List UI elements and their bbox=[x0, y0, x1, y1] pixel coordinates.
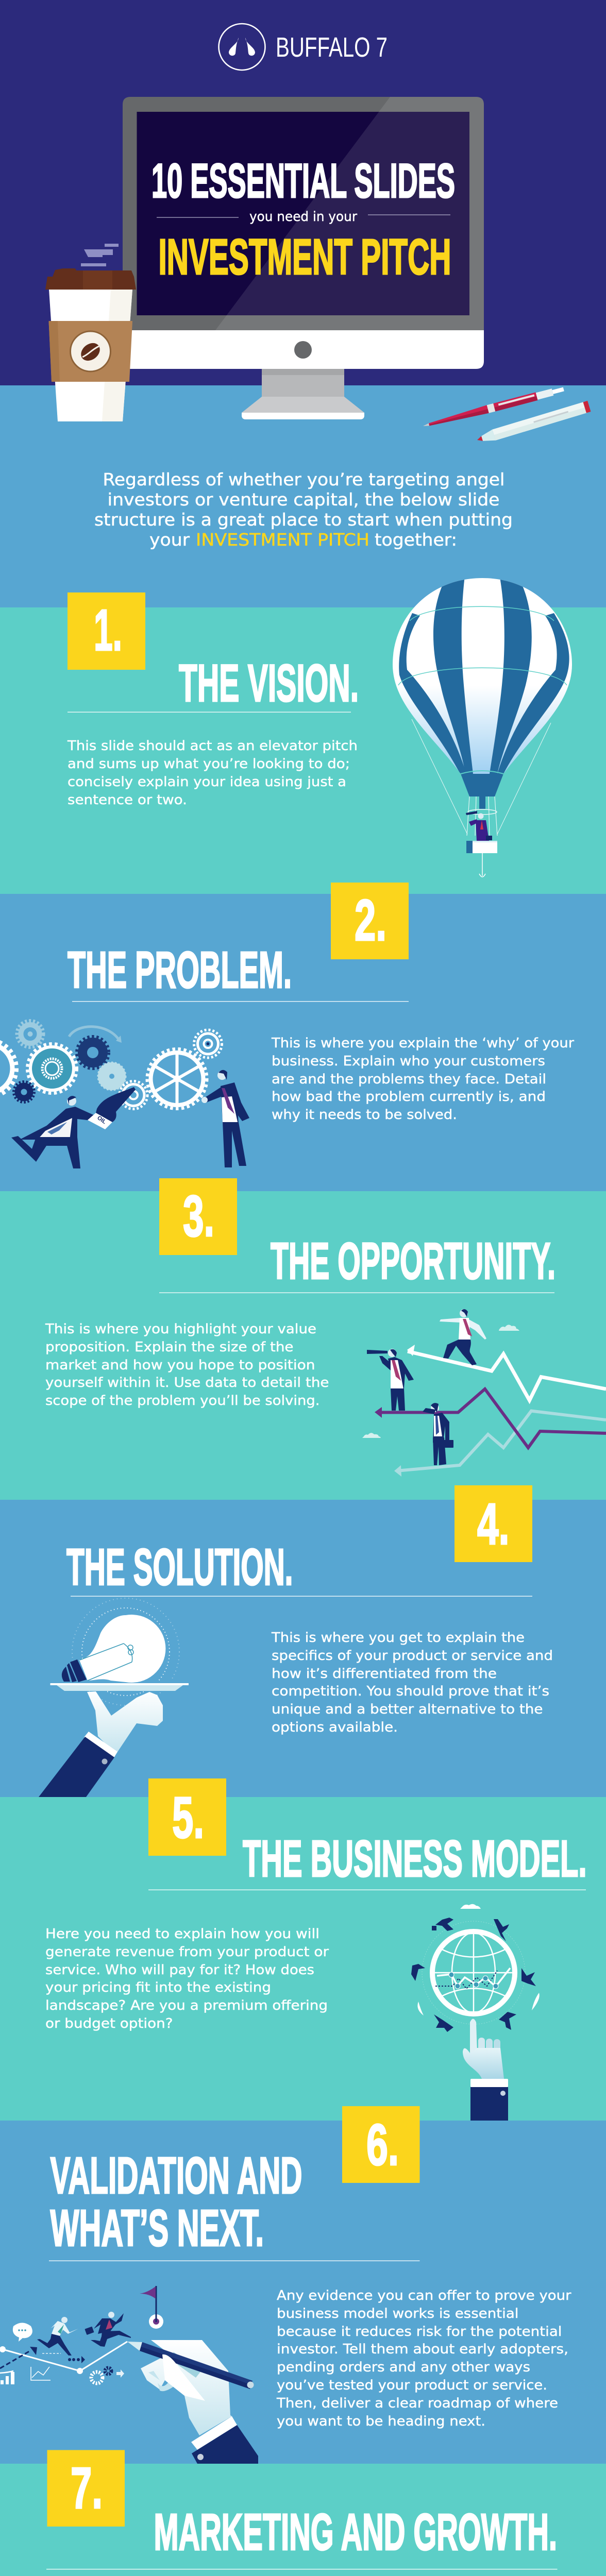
body text 5 bbox=[45, 1926, 329, 2031]
heading: validation and what's next: VALIDATION AND bbox=[50, 2147, 302, 2205]
number box 1: 1. bbox=[94, 598, 122, 663]
panel 2: the problem bbox=[0, 883, 606, 1191]
body text 2: how bad the problem currently is, and bbox=[272, 1089, 546, 1105]
body text 6: Then, deliver a clear roadmap of where bbox=[276, 2396, 558, 2411]
illustration: light bulb on a tray bbox=[39, 1598, 191, 1797]
body text 5: landscape? Are you a premium offering bbox=[45, 1998, 328, 2013]
intro text: INVESTMENT PITCH bbox=[196, 530, 369, 550]
body text 3: This is where you highlight your value bbox=[45, 1321, 316, 1337]
icon: flag target bbox=[140, 2286, 163, 2329]
panel 4: the solution bbox=[0, 1485, 606, 1797]
pens bbox=[422, 385, 591, 446]
body text 1: concisely explain your idea using just a bbox=[68, 774, 346, 790]
body text 4: This is where you get to explain the bbox=[271, 1630, 525, 1646]
body text 2: business. Explain who your customers bbox=[272, 1054, 545, 1069]
body text 6: Any evidence you can offer to prove your bbox=[277, 2288, 571, 2303]
figure: man with telescope bbox=[367, 1349, 414, 1411]
panel: intro bbox=[0, 244, 606, 607]
body text 4: unique and a better alternative to the bbox=[272, 1702, 543, 1717]
body text 5: or budget option? bbox=[45, 2016, 173, 2031]
number box 5 bbox=[148, 1778, 226, 1856]
number box 2: 2. bbox=[355, 888, 386, 953]
body text 1: sentence or two. bbox=[68, 792, 187, 808]
figure: runner in suit bbox=[85, 2312, 131, 2347]
intro text: structure is a great place to start when putting bbox=[94, 510, 513, 530]
number box 7 bbox=[47, 2450, 125, 2527]
number box 4: 4. bbox=[477, 1492, 509, 1556]
monitor stand bbox=[242, 369, 364, 419]
number box 3 bbox=[159, 1178, 237, 1255]
figure: kneeling man with oil can bbox=[11, 1087, 136, 1168]
body text 6: business model works is essential bbox=[277, 2306, 518, 2321]
body text 4: specifics of your product or service and bbox=[272, 1648, 553, 1664]
body text 3: scope of the problem you’ll be solving. bbox=[45, 1393, 319, 1409]
figure: runner in shirt bbox=[37, 2317, 78, 2355]
number box 3: 3. bbox=[183, 1183, 214, 1248]
figure: man turning the wheel bbox=[201, 1070, 249, 1167]
intro text bbox=[94, 470, 513, 550]
body text 4: how it’s differentiated from the bbox=[272, 1666, 497, 1682]
body text 5: generate revenue from your product or bbox=[45, 1944, 329, 1960]
body text 5: service. Who will pay for it? How does bbox=[45, 1962, 314, 1978]
panel 1: the vision bbox=[0, 572, 606, 894]
number box 4 bbox=[454, 1485, 532, 1562]
number box 6 bbox=[342, 2106, 419, 2183]
panel 3: the opportunity bbox=[0, 1178, 606, 1500]
heading: validation and what's next: WHAT’S NEXT. bbox=[50, 2199, 264, 2257]
heading: the vision: THE VISION. bbox=[179, 654, 359, 713]
body text 6 bbox=[276, 2288, 571, 2429]
figure: man with briefcase bbox=[423, 1403, 453, 1465]
coffee cup bbox=[45, 244, 136, 421]
intro text: together: bbox=[375, 530, 457, 550]
intro text: investors or venture capital, the below slide bbox=[107, 490, 500, 510]
heading: the problem: THE PROBLEM. bbox=[68, 941, 292, 999]
illustration: men on growth arrows bbox=[362, 1309, 606, 1477]
monitor bbox=[123, 97, 484, 369]
body text 4 bbox=[271, 1630, 553, 1735]
body text 5: Here you need to explain how you will bbox=[45, 1926, 319, 1942]
body text 6: you’ve tested your product or service. bbox=[277, 2378, 547, 2393]
illustration: hand spinning a globe bbox=[411, 1904, 540, 2121]
body text 1 bbox=[67, 738, 358, 808]
number box 7: 7. bbox=[71, 2455, 103, 2520]
header panel bbox=[0, 0, 606, 385]
body text 2: This is where you explain the ‘why’ of your bbox=[271, 1036, 574, 1051]
heading: validation and what's next bbox=[50, 2147, 302, 2257]
body text 1: This slide should act as an elevator pitch bbox=[67, 738, 358, 754]
subtitle: you need in your bbox=[249, 209, 357, 225]
body text 4: competition. You should prove that it’s bbox=[272, 1684, 549, 1699]
panel 5: the business model bbox=[0, 1778, 606, 2121]
icon: hot air balloon bbox=[393, 572, 572, 877]
body text 1: and sums up what you’re looking to do; bbox=[68, 756, 350, 772]
body text 3: market and how you hope to position bbox=[45, 1358, 315, 1373]
number box 6: 6. bbox=[366, 2112, 399, 2177]
logo: Buffalo 7: BUFFALO 7 bbox=[276, 32, 388, 63]
figure: top man bbox=[440, 1309, 486, 1365]
hand holding pen bbox=[127, 2340, 258, 2464]
heading: the solution: THE SOLUTION. bbox=[66, 1538, 293, 1596]
body text 5: your pricing fit into the existing bbox=[45, 1980, 271, 1995]
body text 6: you want to be heading next. bbox=[277, 2414, 485, 2429]
body text 3: proposition. Explain the size of the bbox=[45, 1340, 294, 1355]
number box 2 bbox=[331, 883, 409, 959]
figure: kneeling man with oil can: OIL bbox=[96, 1115, 107, 1125]
body text 4: options available. bbox=[272, 1720, 398, 1735]
panel 7: marketing and growth bbox=[0, 2450, 606, 2576]
panel 6: validation and what's next bbox=[0, 2106, 606, 2464]
intro text: your bbox=[149, 530, 190, 550]
body text 3 bbox=[45, 1321, 329, 1409]
body text 6: because it reduces risk for the potential bbox=[277, 2324, 562, 2340]
body text 2 bbox=[271, 1036, 574, 1123]
body text 3: yourself within it. Use data to detail the bbox=[45, 1375, 329, 1391]
logo: Buffalo 7 bbox=[218, 24, 388, 70]
body text 2: why it needs to be solved. bbox=[272, 1107, 457, 1123]
number box 5: 5. bbox=[172, 1785, 204, 1850]
intro text: Regardless of whether you’re targeting angel bbox=[103, 470, 505, 489]
body text 2: are and the problems they face. Detail bbox=[272, 1072, 546, 1087]
body text 6: pending orders and any other ways bbox=[277, 2360, 530, 2375]
illustration: hand drawing a chart with runners bbox=[0, 2286, 258, 2464]
illustration: gears and two businessmen bbox=[0, 1021, 249, 1168]
number box 1 bbox=[68, 592, 145, 670]
body text 6: investor. Tell them about early adopters, bbox=[277, 2342, 568, 2357]
